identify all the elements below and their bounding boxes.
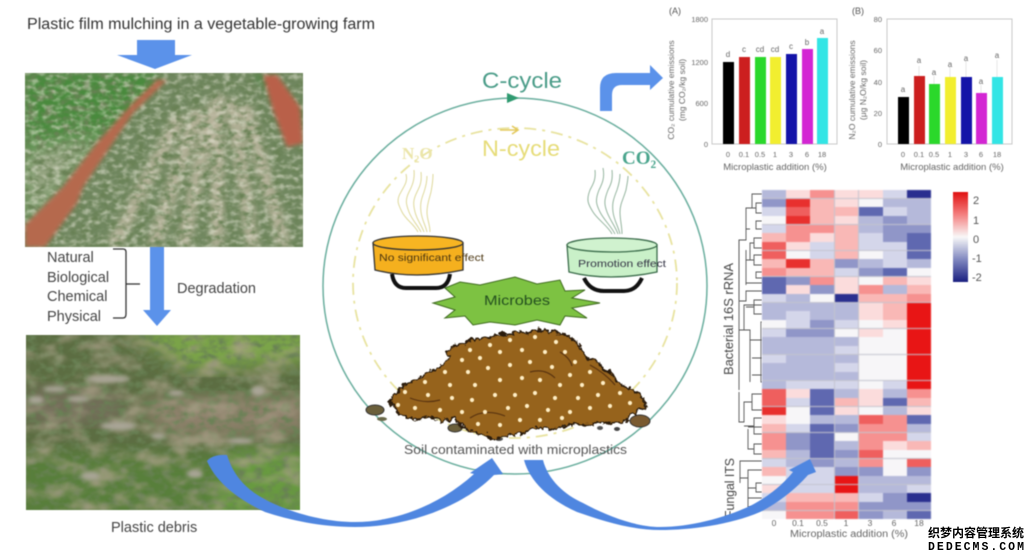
x axis ticks B: 1	[948, 150, 952, 159]
significance letters B	[901, 51, 1000, 94]
label: C-cycle: C-cycle	[482, 68, 562, 93]
x axis title A: Microplastic addition (%)	[723, 162, 827, 173]
label: no significant effect: No significant effect	[379, 252, 484, 264]
watermark	[928, 525, 1024, 554]
significance letters A	[726, 27, 825, 59]
arrow: soil to heatmap curved arrow	[524, 459, 816, 530]
heatmap	[762, 190, 931, 519]
x axis ticks A: 3	[789, 150, 793, 159]
significance letters B: a	[964, 54, 969, 63]
y axis ticks B: 80	[874, 15, 882, 24]
significance letters A: cd	[771, 45, 779, 54]
x axis ticks A: 18	[818, 150, 826, 159]
x axis ticks B	[901, 150, 1001, 159]
icon: CO2 steam	[588, 168, 628, 234]
label: bacterial 16S rRNA: Bacterial 16S rRNA	[721, 263, 736, 375]
label: soil contaminated with microplastics: Soil contaminated with microplastics	[404, 443, 627, 457]
bracket: degradation factors	[113, 249, 140, 318]
heatmap x axis ticks: 0	[772, 518, 777, 528]
significance letters B: a	[995, 51, 1000, 60]
bar chart A: CO2 emissions	[666, 6, 837, 173]
y axis title A	[666, 40, 687, 140]
icon: soil pile with microplastics	[366, 328, 650, 441]
text block: degradation factors: Physical	[47, 309, 101, 325]
y axis ticks B: 0	[878, 140, 882, 149]
label: degradation: Degradation	[177, 281, 256, 297]
y axis ticks B	[874, 15, 882, 149]
heatmap x axis ticks: 18	[914, 518, 924, 528]
x axis ticks B: 18	[993, 150, 1001, 159]
arrow: top down arrow	[117, 40, 192, 69]
watermark: DEDECMS.COM	[928, 541, 1024, 554]
heatmap colour scale: 0	[973, 234, 979, 246]
C-cycle circle	[323, 93, 707, 474]
heatmap x axis ticks: 1	[844, 518, 849, 528]
panel label A: (A)	[669, 6, 681, 16]
y axis title B: (μg N₂O/kg soil)	[858, 60, 868, 120]
x axis ticks B: 0	[901, 150, 905, 159]
label: CO2: CO₂	[622, 148, 656, 169]
bars A	[723, 38, 828, 144]
y axis ticks A: 1800	[691, 15, 708, 24]
y axis ticks B: 60	[874, 46, 882, 55]
heatmap x axis ticks: 6	[892, 518, 897, 528]
y axis ticks B: 40	[874, 78, 882, 87]
significance letters A: d	[726, 50, 730, 59]
heatmap colour scale: 2	[973, 195, 979, 207]
heatmap colour scale: -1	[972, 253, 982, 265]
label: promotion effect: Promotion effect	[578, 258, 666, 270]
text block: degradation factors: Natural	[47, 250, 94, 266]
heatmap x axis ticks: 3	[868, 518, 873, 528]
significance letters A: c	[789, 42, 793, 51]
label: plastic debris: Plastic debris	[111, 520, 197, 536]
dendrogram: heatmap row clustering	[739, 194, 762, 507]
label: fungal ITS: Fungal ITS	[722, 458, 737, 518]
significance letters A: b	[805, 38, 810, 47]
arrow: bent arrow to charts	[600, 65, 663, 111]
photo: vegetable farm field	[25, 73, 303, 247]
heatmap colour scale: -2	[972, 272, 982, 284]
y axis ticks A: 0	[704, 140, 708, 149]
label: N2O: N₂O	[402, 144, 433, 163]
y axis ticks A: 600	[695, 99, 708, 108]
heatmap x axis ticks: 0.1	[792, 518, 804, 528]
significance letters A: a	[820, 27, 825, 36]
y axis ticks B: 20	[874, 109, 882, 118]
arrow: degradation down arrow	[143, 247, 171, 326]
significance letters A: c	[742, 45, 746, 54]
label: N-cycle: N-cycle	[482, 136, 560, 161]
x axis ticks B: 0.5	[929, 150, 939, 159]
x axis ticks B: 0.1	[914, 150, 924, 159]
x axis title B: Microplastic addition (%)	[900, 162, 1004, 173]
bar chart B: N2O emissions	[847, 6, 1012, 173]
x axis ticks A: 0	[726, 150, 730, 159]
arrow: debris to soil curved arrow	[207, 455, 503, 527]
y axis title B	[847, 40, 868, 140]
x axis ticks A	[726, 150, 826, 159]
significance letters B: a	[932, 68, 937, 77]
significance letters B: a	[917, 56, 922, 65]
significance letters B: a	[948, 60, 953, 69]
x axis ticks B: 3	[964, 150, 968, 159]
title: Plastic film mulching in a vegetable-growing farm	[27, 16, 375, 33]
icon: right pot with handle	[567, 238, 657, 291]
y axis title A: CO₂ cumulative emissions	[666, 40, 676, 140]
text block: degradation factors: Chemical	[47, 289, 107, 305]
y axis ticks A: 1200	[691, 58, 708, 67]
heatmap colour scale: 1	[973, 215, 979, 227]
icon: N2O steam	[398, 170, 433, 232]
significance letters B: a	[901, 85, 906, 94]
x axis ticks A: 0.1	[739, 150, 749, 159]
N-cycle dashed circle	[353, 126, 677, 438]
heatmap x axis ticks: 0.5	[816, 518, 828, 528]
x axis ticks B: 6	[979, 150, 983, 159]
x axis ticks A: 6	[805, 150, 809, 159]
icon: microbes burst	[433, 277, 600, 325]
bars B	[898, 76, 1003, 144]
heatmap x axis title: Microplastic addition (%)	[790, 529, 908, 540]
y axis title B: N₂O cumulative emissions	[847, 40, 857, 140]
photo: plastic debris in field	[25, 334, 301, 511]
significance letters A: cd	[756, 45, 764, 54]
text block: degradation factors: Biological	[47, 270, 109, 286]
heatmap colour scale	[953, 192, 982, 284]
panel label B: (B)	[852, 6, 864, 16]
significance letters B: a	[979, 77, 984, 86]
label: microbes: Microbes	[484, 292, 550, 308]
y axis title A: (mg CO₂/kg soil)	[677, 59, 687, 121]
icon: left pot with handle	[373, 236, 463, 288]
error bars B	[919, 60, 997, 93]
x axis ticks A: 1	[773, 150, 777, 159]
watermark: 织梦内容管理系统	[928, 525, 1024, 540]
y axis ticks A	[691, 15, 708, 149]
x axis ticks A: 0.5	[755, 150, 765, 159]
heatmap x axis ticks	[772, 518, 924, 528]
text block: degradation factors	[47, 250, 109, 325]
